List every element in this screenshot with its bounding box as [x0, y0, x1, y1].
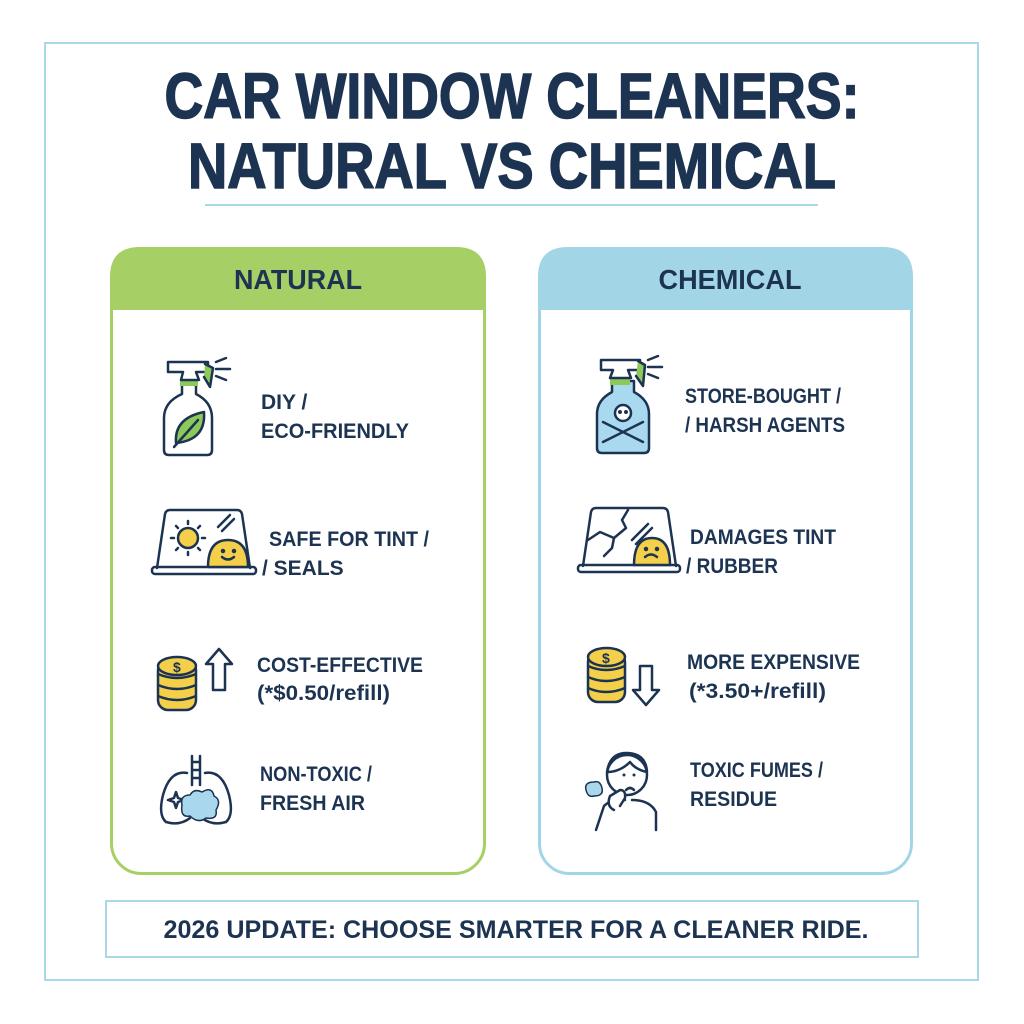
text: non-toxic: [260, 763, 372, 815]
title: NATURAL VS CHEMICAL: [188, 130, 836, 202]
text: safe for tint: [262, 528, 429, 580]
text: more expensive: MORE EXPENSIVE: [687, 651, 860, 674]
text: diy: [261, 391, 409, 443]
icon: window with sun: [152, 510, 256, 574]
panel: chemical: [538, 247, 913, 874]
icon: spray bottle with leaf: [164, 358, 230, 455]
text: more expensive: (*3.50+/refill): [689, 680, 826, 703]
footer banner: [106, 901, 918, 957]
footer banner: 2026 UPDATE: CHOOSE SMARTER FOR A CLEANER RIDE.: [164, 916, 868, 944]
panel: chemical: $: [602, 650, 610, 666]
icon: spray bottle with skull: [597, 356, 662, 453]
text: store-bought: [685, 385, 845, 437]
text: toxic fumes: [690, 759, 823, 811]
text: damages tint: DAMAGES TINT: [690, 526, 836, 549]
text: non-toxic: FRESH AIR: [260, 792, 365, 815]
title: [164, 60, 860, 202]
text: diy: DIY /: [261, 391, 307, 414]
icon: lungs: [161, 756, 231, 823]
text: cost-effective: COST-EFFECTIVE: [257, 654, 423, 677]
text: safe for tint: / SEALS: [262, 557, 344, 580]
text: toxic fumes: TOXIC FUMES /: [690, 759, 823, 782]
icon: coins with down arrow: [588, 648, 659, 705]
text: non-toxic: NON-TOXIC /: [260, 763, 372, 786]
text: store-bought: STORE-BOUGHT /: [685, 385, 841, 408]
text: cost-effective: (*$0.50/refill): [257, 682, 390, 705]
text: cost-effective: [257, 654, 423, 705]
title: CAR WINDOW CLEANERS:: [164, 60, 860, 132]
icon: cracked window: [578, 508, 680, 572]
icon: person coughing: [586, 753, 656, 830]
text: toxic fumes: RESIDUE: [690, 788, 777, 811]
panel: natural: [110, 247, 486, 874]
text: damages tint: / RUBBER: [686, 555, 778, 578]
text: more expensive: [687, 651, 860, 703]
heading: natural: NATURAL: [234, 264, 362, 295]
icon: coins with up arrow: [158, 649, 232, 710]
text: diy: ECO-FRIENDLY: [261, 420, 409, 443]
heading: chemical: CHEMICAL: [658, 264, 802, 295]
panel: natural: $: [173, 659, 181, 675]
text: store-bought: / HARSH AGENTS: [685, 414, 845, 437]
text: safe for tint: SAFE FOR TINT /: [269, 528, 429, 551]
text: damages tint: [686, 526, 836, 578]
